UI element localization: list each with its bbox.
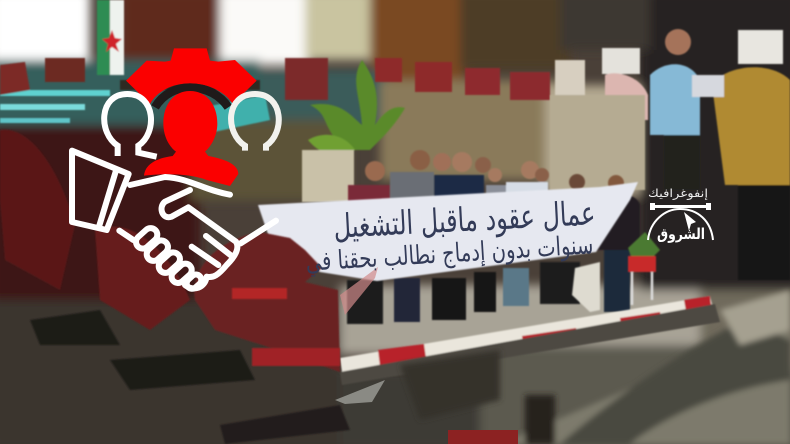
icon: red central person [144, 91, 238, 186]
icon part: knuckles [133, 225, 160, 251]
icon: right outlined person [231, 94, 279, 151]
algerian flag [97, 0, 124, 75]
icon part: wrist line [241, 221, 276, 243]
protesters holding papers, top right [550, 29, 790, 280]
icon: gear inner dark arc [155, 88, 228, 107]
banner cloth [258, 182, 638, 281]
red and white painted curb [340, 296, 720, 385]
planter with flowers [572, 232, 660, 312]
icon: left outlined person [104, 94, 157, 157]
logo wordmark: الشروق [657, 225, 705, 243]
icon: people, gear and handshake [72, 48, 279, 291]
icon part: upper hand outline [130, 177, 230, 195]
logo arc [648, 209, 713, 240]
icon part: cuff band [99, 172, 116, 227]
icon part: sleeve cuff [72, 151, 129, 230]
road reflection [400, 290, 790, 444]
conference chairs and table [0, 58, 550, 444]
banner slogan line one: عمال عقود ماقبل التشغيل [333, 193, 596, 246]
icon part: lower hand edge [119, 231, 133, 240]
icon: red gear [126, 48, 257, 104]
logo: infographic and Echorouk mark [648, 186, 713, 243]
banner slogan line two: سنوات بدون إدماج نطالب بحقنا في [305, 230, 594, 278]
icon part: finger lines [192, 236, 232, 265]
logo bar [650, 203, 711, 210]
potted plant [302, 60, 405, 202]
banner slogan [305, 193, 596, 278]
icon part: thumb and palm [162, 190, 237, 288]
group of workers behind banner [347, 150, 640, 324]
logo cursor [684, 212, 696, 231]
icon: white handshake [72, 151, 276, 291]
red brush stroke overlay [194, 232, 518, 444]
logo title: إنفوغرافيك [648, 186, 708, 201]
